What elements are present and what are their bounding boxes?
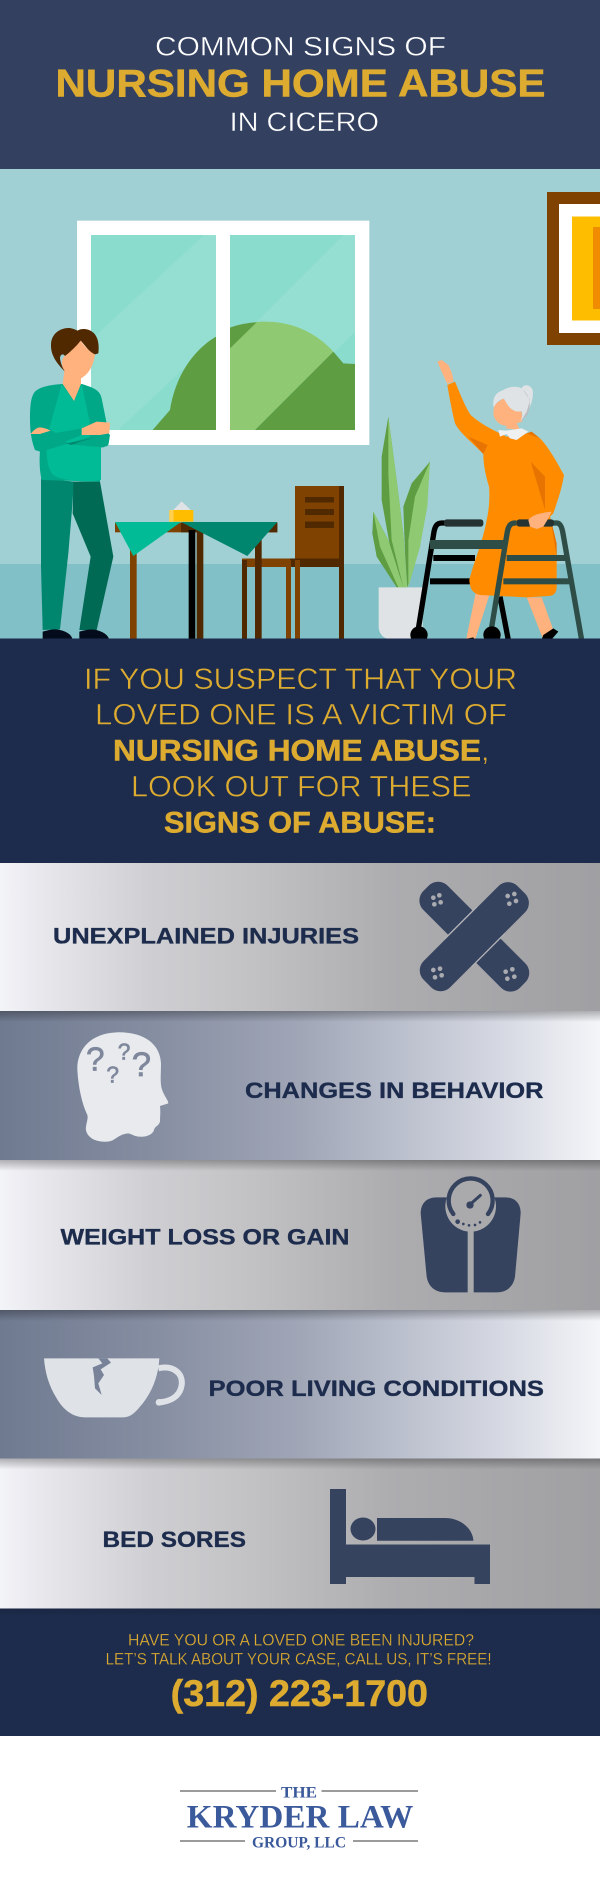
icon: head with question marks: ? bbox=[118, 1038, 130, 1064]
logo: the kryder law group: GROUP, LLC bbox=[252, 1834, 346, 1852]
intro line 5: SIGNS OF ABUSE: bbox=[164, 807, 436, 840]
title line: in cicero: IN CICERO bbox=[230, 107, 379, 137]
sign strip: poor living conditions bbox=[0, 1310, 600, 1458]
icon: head with question marks: ? bbox=[132, 1046, 151, 1084]
resident raised hand bbox=[437, 360, 453, 384]
icon: weighing scale bbox=[421, 1178, 521, 1293]
icon: cracked cup bbox=[44, 1358, 182, 1417]
intro panel bbox=[0, 638, 600, 864]
call to action line 1: HAVE YOU OR A LOVED ONE BEEN INJURED? bbox=[128, 1631, 474, 1650]
nurse arms bbox=[74, 434, 110, 448]
nurse neck and face bbox=[62, 341, 95, 401]
logo: the kryder law group: THE bbox=[281, 1784, 317, 1802]
logo: the kryder law group: KRYDER LAW bbox=[187, 1800, 413, 1836]
sign strip: bed sores bbox=[0, 1458, 600, 1608]
label: WEIGHT LOSS OR GAIN bbox=[60, 1224, 350, 1249]
walker and resident bbox=[410, 360, 582, 644]
resident hair bbox=[493, 385, 533, 422]
walker front frame bbox=[430, 519, 582, 644]
plant pot bbox=[379, 587, 423, 639]
call to action line 2: LET’S TALK ABOUT YOUR CASE, CALL US, IT’S FREE! bbox=[106, 1650, 492, 1668]
label: BED SORES bbox=[102, 1527, 246, 1552]
resident face bbox=[493, 398, 522, 430]
plant bbox=[372, 417, 430, 639]
sign strip: unexplained injuries bbox=[0, 863, 600, 1011]
nurse hair bbox=[51, 328, 99, 372]
title line: common signs of: COMMON SIGNS OF bbox=[155, 32, 446, 62]
sign strip: weight loss or gain bbox=[0, 1160, 600, 1310]
intro line 2: LOVED ONE IS A VICTIM OF bbox=[95, 698, 507, 732]
illustration: nursing home room bbox=[0, 169, 600, 644]
picture frame bbox=[547, 192, 600, 345]
title line: nursing home abuse: NURSING HOME ABUSE bbox=[56, 63, 546, 106]
label: UNEXPLAINED INJURIES bbox=[53, 924, 359, 949]
intro line 3: , bbox=[481, 735, 489, 768]
nurse tunic bbox=[30, 384, 109, 482]
nurse bbox=[30, 328, 113, 640]
icon: person in bed bbox=[330, 1489, 490, 1584]
intro line 1: IF YOU SUSPECT THAT YOUR bbox=[84, 663, 517, 696]
call to action panel bbox=[0, 1608, 600, 1736]
icon: crossed bandages bbox=[414, 876, 535, 997]
phone number: (312) 223-1700 bbox=[171, 1673, 428, 1714]
header panel bbox=[0, 0, 600, 169]
icon: head with question marks bbox=[77, 1032, 168, 1142]
resident collar bbox=[498, 428, 528, 440]
table with tissue box bbox=[115, 501, 277, 640]
legs bbox=[466, 592, 489, 640]
icon: head with question marks: ? bbox=[106, 1062, 119, 1088]
icon: head with question marks: ? bbox=[86, 1042, 105, 1079]
chair bbox=[242, 486, 344, 639]
intro line 4: LOOK OUT FOR THESE bbox=[131, 770, 472, 804]
walker rear frame bbox=[410, 519, 508, 644]
intro line 3: NURSING HOME ABUSE bbox=[113, 735, 481, 768]
window bbox=[77, 221, 369, 445]
label: CHANGES IN BEHAVIOR bbox=[245, 1078, 544, 1103]
sign strip: changes in behavior bbox=[0, 1011, 600, 1160]
resident hand on walker bbox=[528, 512, 552, 529]
label: POOR LIVING CONDITIONS bbox=[208, 1376, 544, 1401]
nurse trousers bbox=[41, 478, 74, 630]
logo: the kryder law group bbox=[180, 1784, 418, 1852]
resident dress bbox=[447, 382, 564, 597]
